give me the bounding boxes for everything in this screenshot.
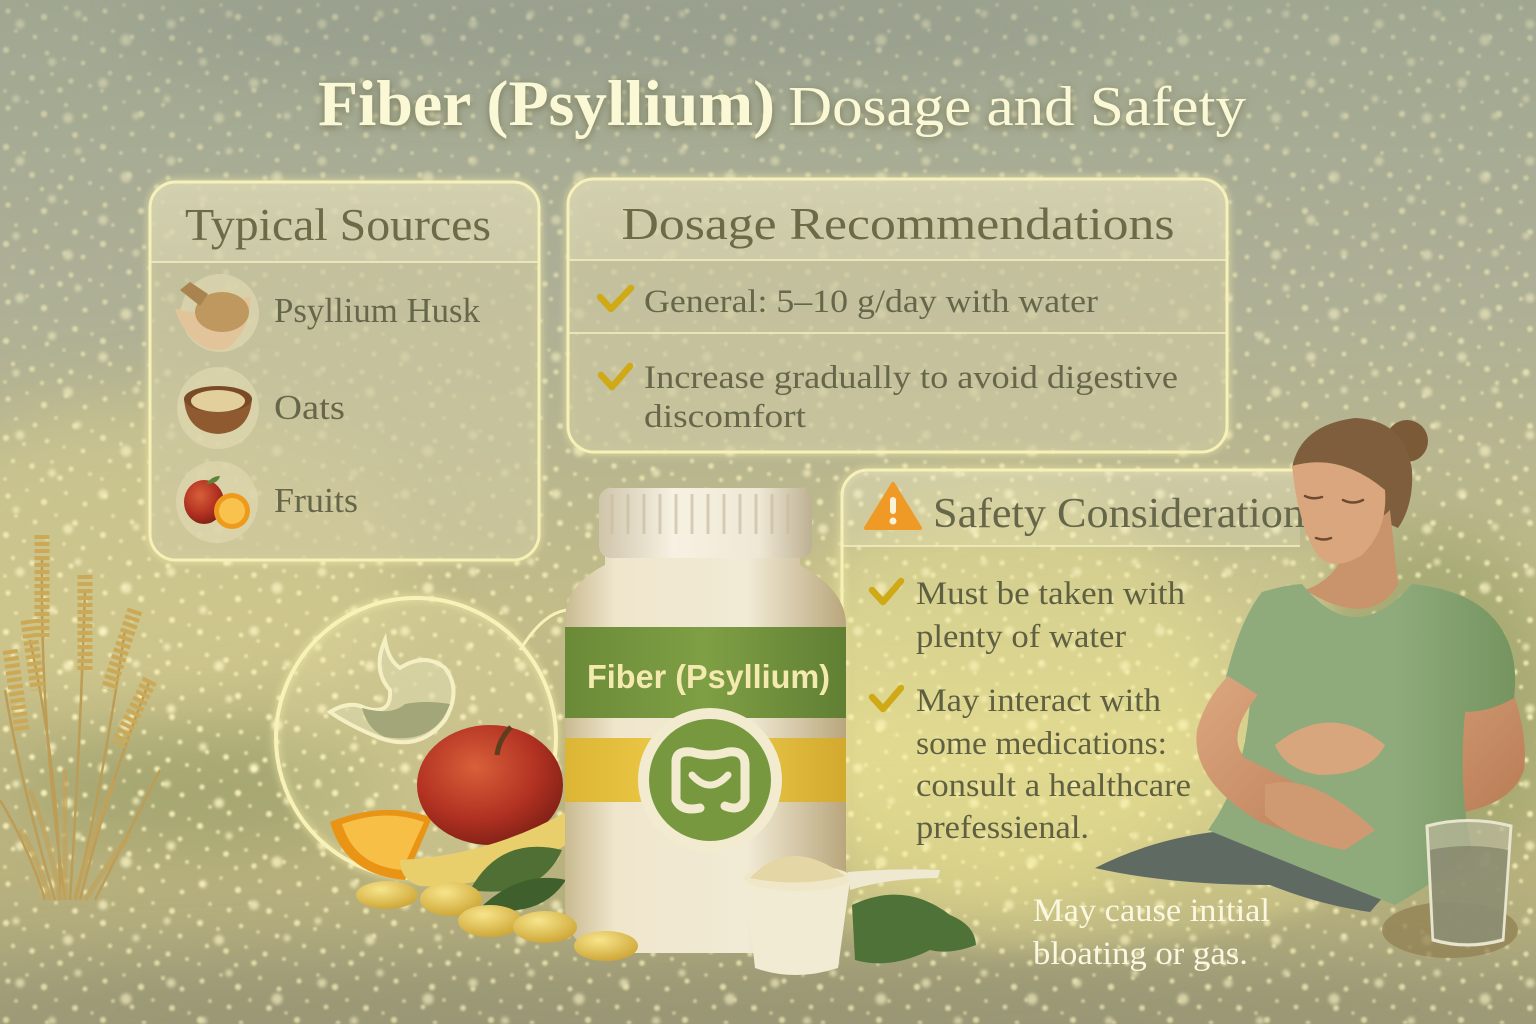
illustration: scoop with powder xyxy=(744,856,976,975)
title: Fiber (Psyllium) xyxy=(318,68,775,140)
title xyxy=(318,68,1246,140)
hair bun xyxy=(1386,420,1428,462)
icon: check xyxy=(600,288,631,309)
text: medication warning: May interact with xyxy=(916,683,1162,719)
panel: safety considerations xyxy=(842,470,1330,952)
banana xyxy=(400,812,566,886)
text: bloating note xyxy=(1033,893,1270,972)
heading: safety considerations: Safety Consideration xyxy=(933,491,1305,537)
text: water warning xyxy=(916,576,1186,655)
illustration: supplement bottle xyxy=(565,488,846,953)
face xyxy=(1292,462,1385,564)
text: medication warning xyxy=(916,683,1191,846)
title: Dosage and Safety xyxy=(788,76,1246,138)
label: fruits: Fruits xyxy=(274,481,358,520)
icon: check xyxy=(872,581,901,602)
text: medication warning: consult a healthcare xyxy=(916,768,1191,804)
illustration: woman xyxy=(1095,418,1525,912)
hands xyxy=(1275,722,1385,775)
torso xyxy=(1208,584,1515,905)
bottle cap xyxy=(599,488,812,558)
text: bloating note: bloating or gas. xyxy=(1033,936,1248,972)
icon: wheat plant xyxy=(0,535,160,900)
right arm xyxy=(1370,650,1525,815)
icon: check xyxy=(601,366,630,387)
illustration: water glass xyxy=(1382,820,1518,958)
orange slice xyxy=(330,810,432,880)
text: water warning: plenty of water xyxy=(916,619,1126,655)
text: increase gradually xyxy=(644,360,1178,435)
label: psyllium husk: Psyllium Husk xyxy=(274,291,480,330)
panel: typical sources xyxy=(150,182,539,560)
text: increase gradually: Increase gradually to avoid digestive xyxy=(644,360,1178,396)
text: water warning: Must be taken with xyxy=(916,576,1186,612)
heading: typical sources: Typical Sources xyxy=(185,199,491,250)
icon: psyllium husk xyxy=(175,274,259,352)
icon: stomach circle xyxy=(276,598,570,878)
icon: warning triangle xyxy=(866,484,920,528)
illustration: capsules xyxy=(356,881,638,961)
face features xyxy=(1305,496,1363,540)
text: bloating note: May cause initial xyxy=(1033,893,1270,929)
bottle label text: Fiber (Psyllium) xyxy=(587,658,830,695)
illustration: fruit and leaves xyxy=(330,725,566,911)
heading: dosage recommendations: Dosage Recommendations xyxy=(622,198,1174,249)
icon: oats xyxy=(177,367,259,449)
icon: check xyxy=(872,688,901,709)
icon: fruits xyxy=(176,461,258,543)
icon: intestine emblem xyxy=(638,708,782,852)
text: general dose: General: 5–10 g/day with water xyxy=(644,284,1098,320)
text: increase gradually: discomfort xyxy=(644,399,806,435)
text: medication warning: some medications: xyxy=(916,726,1167,762)
label: oats: Oats xyxy=(274,388,345,427)
left arm xyxy=(1196,676,1357,850)
neck xyxy=(1305,510,1398,609)
legs xyxy=(1095,830,1385,912)
leaves xyxy=(470,847,562,892)
apple xyxy=(417,725,563,845)
hair xyxy=(1292,418,1412,528)
panel: dosage recommendations xyxy=(568,179,1227,452)
text: medication warning: prefessienal. xyxy=(916,810,1089,846)
